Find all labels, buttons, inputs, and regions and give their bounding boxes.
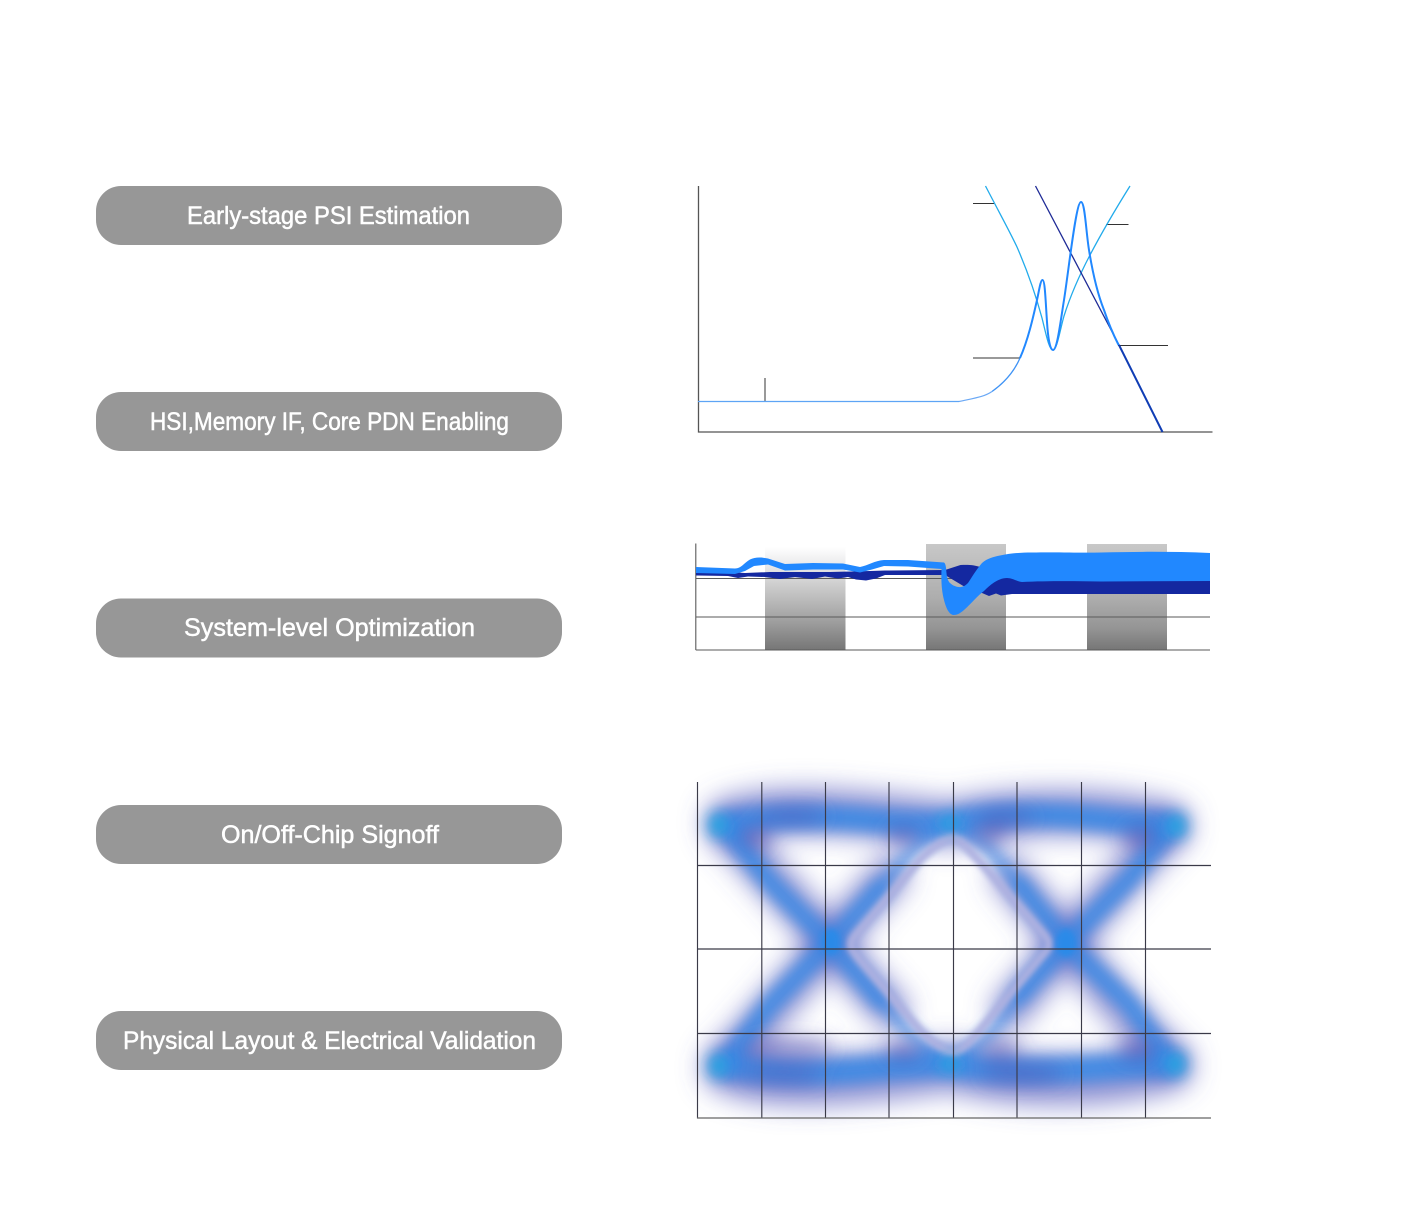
label: Physical Layout & Electrical Validation [96,1011,562,1070]
shaded bar 2 [926,544,1006,650]
blue eye traces [726,815,1170,1072]
label: HSI, Memory IF, Core PDN Enabling: HSI,Memory IF, Core PDN Enabling [150,408,509,436]
annotation ticks [765,204,1168,401]
light waveform [696,552,1210,615]
axes [698,186,1212,432]
shaded bar 1 [765,547,846,650]
chart: eye diagram [697,782,1211,1118]
chart: impedance curves [698,186,1212,432]
label: System-level Optimization [96,598,562,658]
label: System-level Optimization: System-level Optimization [184,614,475,642]
pale inner diamond [851,838,1049,1052]
chart: power noise waveform [696,544,1210,650]
label: HSI, Memory IF, Core PDN Enabling [96,392,562,451]
grid and axes [696,544,1210,650]
eye diagram grid [698,782,1211,1118]
shaded bar 3 [1087,544,1167,650]
label: Early-stage PSI Estimation [96,186,562,245]
light cyan curve [986,186,1130,350]
navy line [1036,186,1119,345]
purple patches in rails and triangle corners [742,809,1156,1083]
label: On/Off-Chip Signoff [96,805,562,864]
soft purple halo [728,812,1168,1081]
dark waveform [696,565,1210,596]
label: Physical Layout & Electrical Validation: Physical Layout & Electrical Validation [123,1027,536,1055]
label: On/Off-Chip Signoff: On/Off-Chip Signoff [221,821,439,849]
blue resonance curve [1020,202,1119,358]
label: Early-stage PSI Estimation: Early-stage PSI Estimation [187,202,470,230]
bright crossing points [708,813,1187,1078]
